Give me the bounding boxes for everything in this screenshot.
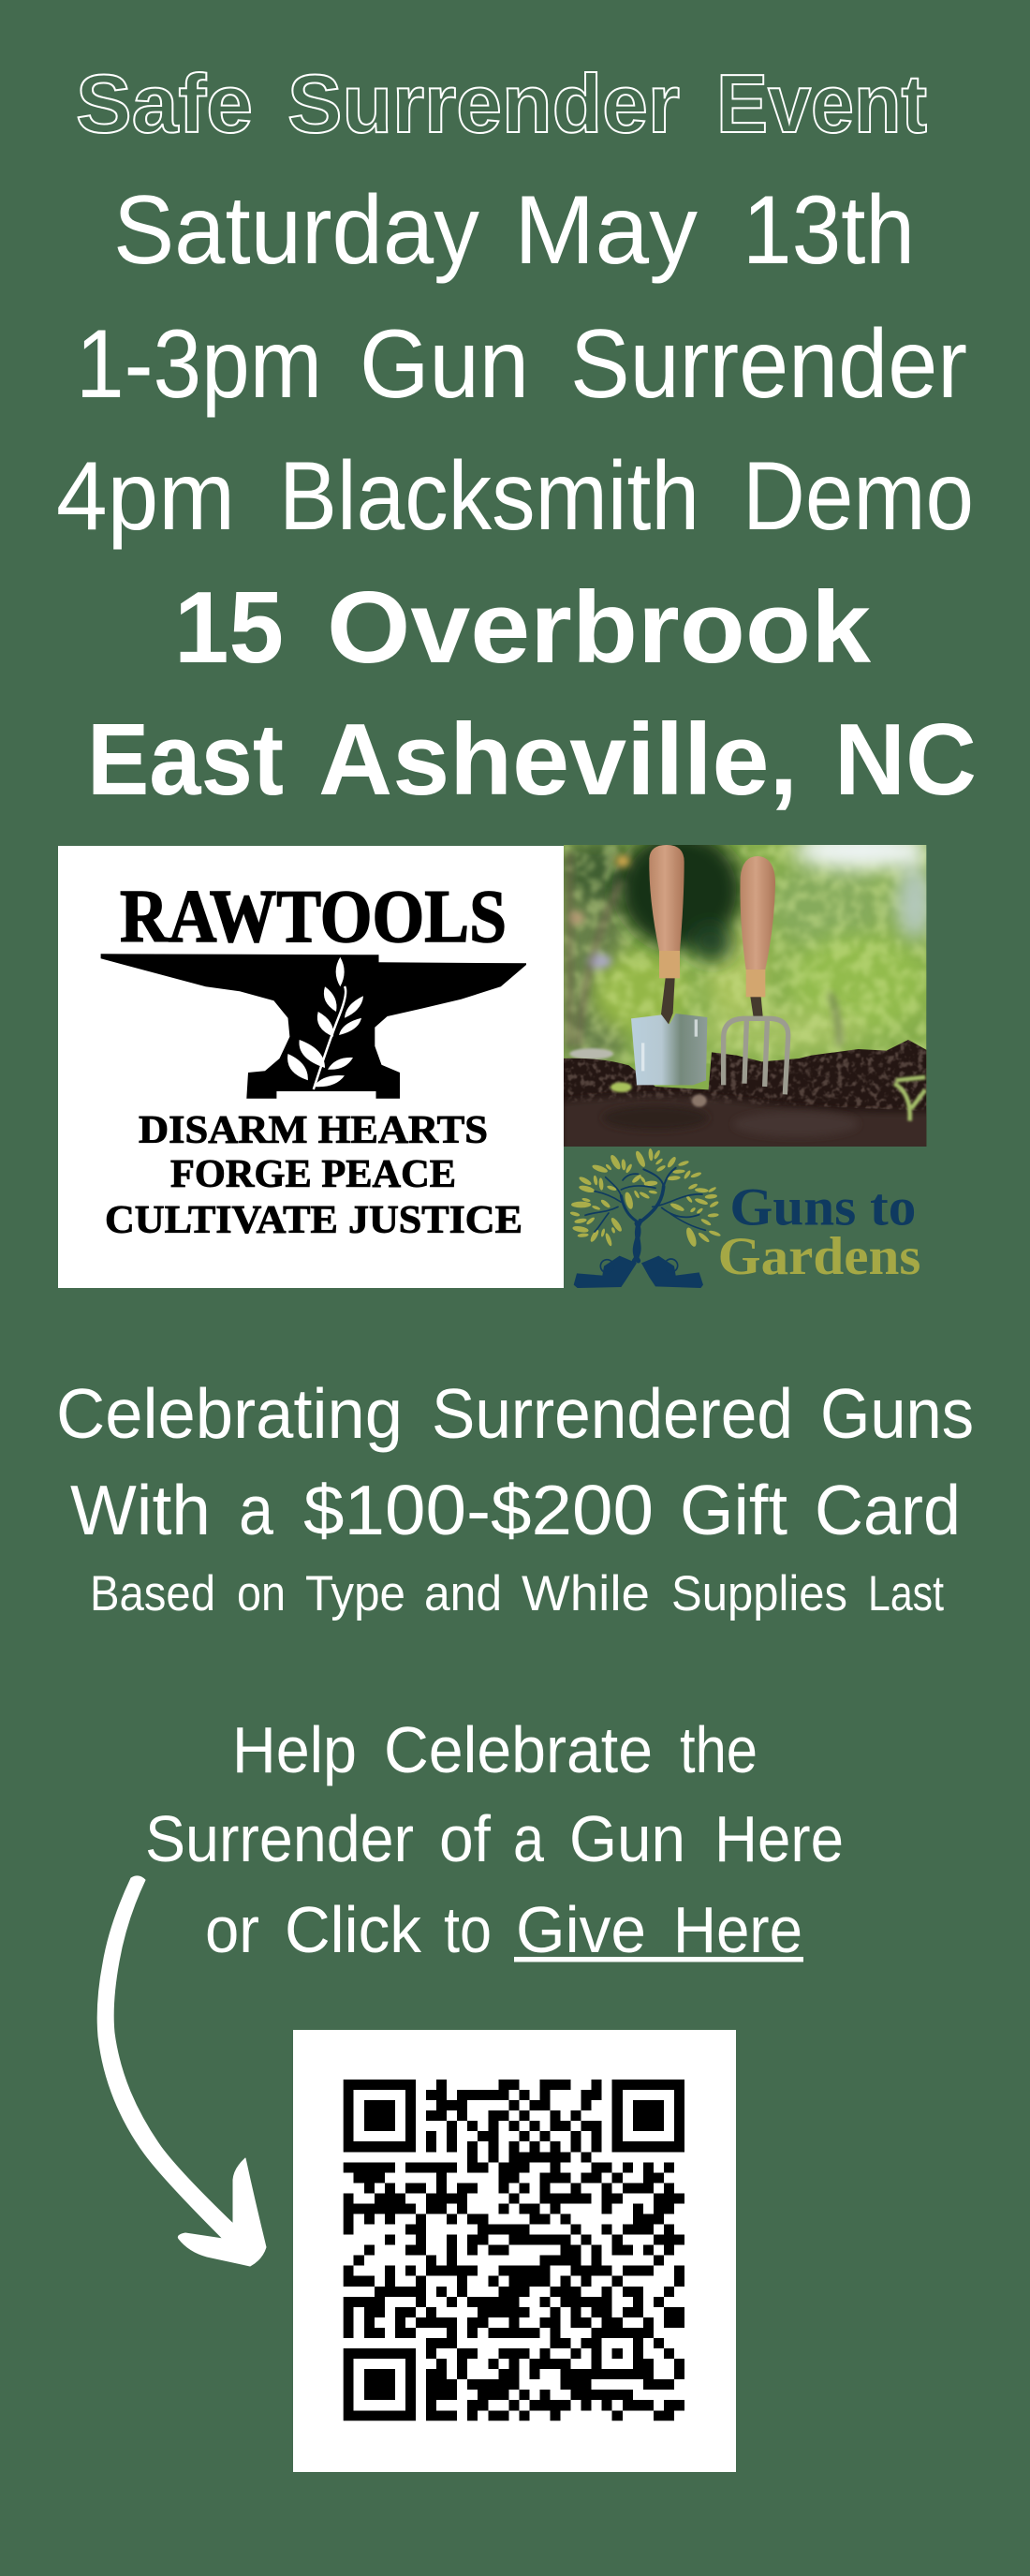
call to action text — [145, 1713, 844, 1966]
event date and schedule: 4pm — [56, 442, 235, 551]
call to action text: Celebrate — [384, 1713, 653, 1786]
logo text: Guns to — [729, 1178, 916, 1236]
event date and schedule: Saturday — [113, 176, 479, 285]
gift card text block: Supplies — [671, 1566, 847, 1621]
gift card text block: Surrendered — [432, 1374, 793, 1453]
event date and schedule: Surrender — [570, 310, 967, 419]
call to action text: Here — [714, 1802, 844, 1875]
soil — [564, 1040, 927, 1147]
event address: Overbrook — [327, 570, 871, 685]
event date and schedule: Blacksmith — [279, 442, 699, 551]
gift card text block: With — [70, 1471, 211, 1549]
logo tagline: DISARM HEARTS — [139, 1109, 488, 1152]
event address: East — [87, 703, 284, 817]
gift card text block: Card — [815, 1471, 961, 1549]
gift card text block: $100-$200 — [303, 1471, 654, 1549]
logo text — [718, 1178, 920, 1286]
title: Safe Surrender Event — [76, 57, 927, 150]
logo text: Gardens — [718, 1228, 920, 1286]
logo tagline — [105, 1109, 522, 1242]
gift card text block: Last — [868, 1566, 944, 1621]
trowel — [631, 845, 707, 1085]
QR code panel — [293, 2030, 736, 2472]
icon: tree growing from crossed pistols — [569, 1148, 721, 1288]
call to action text: Click — [285, 1893, 422, 1966]
event date and schedule: 1-3pm — [76, 310, 322, 419]
garden fork — [724, 856, 788, 1094]
arrow pointing to QR code — [97, 1876, 266, 2266]
gift card text block: on — [237, 1566, 286, 1621]
call to action text: to — [444, 1893, 492, 1966]
event date and schedule: Demo — [743, 442, 974, 551]
Guns to Gardens logo — [569, 1148, 920, 1288]
title: Safe Surrender Event: Safe — [76, 57, 253, 150]
event date and schedule: May — [514, 176, 698, 285]
gift card text block: While — [522, 1566, 650, 1621]
event date and schedule: 13th — [743, 176, 915, 285]
call to action text: Here — [673, 1893, 802, 1966]
QR code — [343, 2080, 684, 2421]
gift card text block: Type — [305, 1566, 405, 1621]
event address: 15 — [174, 570, 284, 685]
gift card text block: a — [239, 1471, 273, 1549]
event address: Asheville, — [318, 703, 798, 817]
call to action text: Help — [232, 1713, 357, 1786]
panel: RAWTOOLS logo — [58, 846, 564, 1288]
gift card text block: Gift — [680, 1471, 787, 1549]
title: Safe Surrender Event: Event — [716, 57, 927, 150]
event address — [87, 570, 977, 817]
event date and schedule: Gun — [360, 310, 529, 419]
gift card text block: Guns — [820, 1374, 974, 1453]
call to action text: the — [680, 1713, 758, 1786]
call to action text: of — [439, 1802, 492, 1875]
photo: garden trowel and fork in soil — [564, 845, 927, 1147]
call to action text: a — [513, 1802, 544, 1875]
gift card text block: Celebrating — [56, 1374, 403, 1453]
gift card text block: and — [424, 1566, 502, 1621]
gift card text block: Based — [90, 1566, 215, 1621]
logo tagline: FORGE PEACE — [170, 1153, 456, 1196]
icon: anvil with olive branch — [101, 954, 526, 1099]
logo tagline: CULTIVATE JUSTICE — [105, 1199, 522, 1242]
event address: NC — [834, 703, 977, 817]
logo wordmark: RAWTOOLS — [120, 876, 507, 958]
call to action text: Gun — [569, 1802, 685, 1875]
call to action text: Give — [516, 1893, 646, 1966]
event date and schedule — [56, 176, 974, 551]
call to action text: Surrender — [145, 1802, 414, 1875]
call to action text: or — [205, 1893, 259, 1966]
title: Safe Surrender Event: Surrender — [287, 57, 680, 150]
gift card text block — [56, 1374, 974, 1621]
